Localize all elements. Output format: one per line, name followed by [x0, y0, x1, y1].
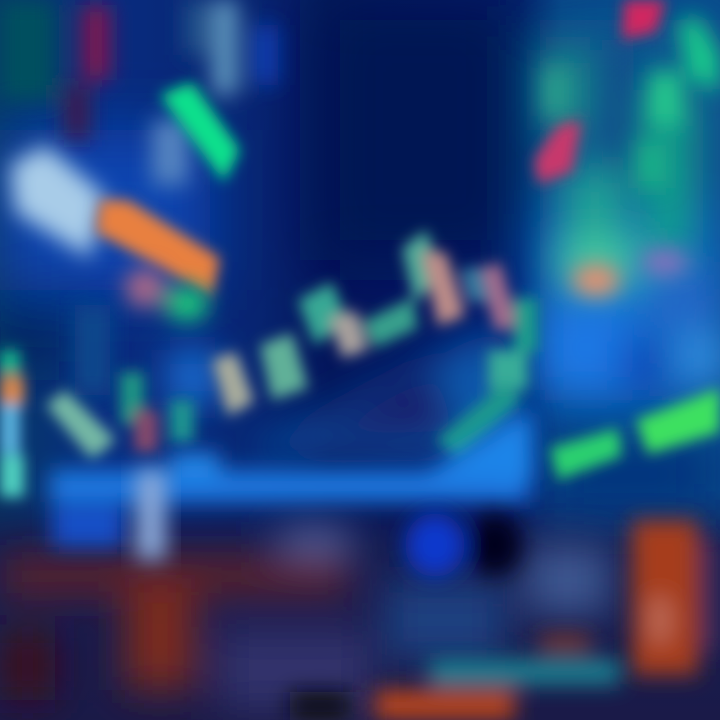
chart: area beneath the trend line — [170, 325, 530, 455]
icon: pink and green candle base — [125, 268, 209, 322]
chart: rising trend of blurred candles — [46, 230, 538, 460]
panel: left side columns — [0, 0, 278, 395]
panel: right side candle columns — [545, 40, 720, 390]
icon: red candle top right — [622, 0, 666, 40]
background glow regions — [0, 0, 720, 510]
icon: pink candle right — [534, 120, 582, 184]
icon: orange candle — [96, 200, 220, 296]
icon: green candle top left — [160, 82, 240, 182]
icon: blue and black circles — [405, 513, 521, 577]
icon: left edge candle — [0, 350, 24, 497]
icon: white glow block — [10, 145, 105, 258]
icon: orange pillar bottom right — [632, 520, 720, 675]
panel: bottom reflections — [0, 525, 610, 710]
icon: orange spot right — [572, 249, 689, 296]
icon: green candles top right — [545, 16, 720, 188]
panel: bottom edge orange and teal glow — [290, 635, 620, 720]
icon: pale vertical streak — [136, 470, 166, 560]
icon: green streak lower right — [550, 388, 720, 480]
panel: glowing horizontal blue band — [50, 410, 535, 547]
